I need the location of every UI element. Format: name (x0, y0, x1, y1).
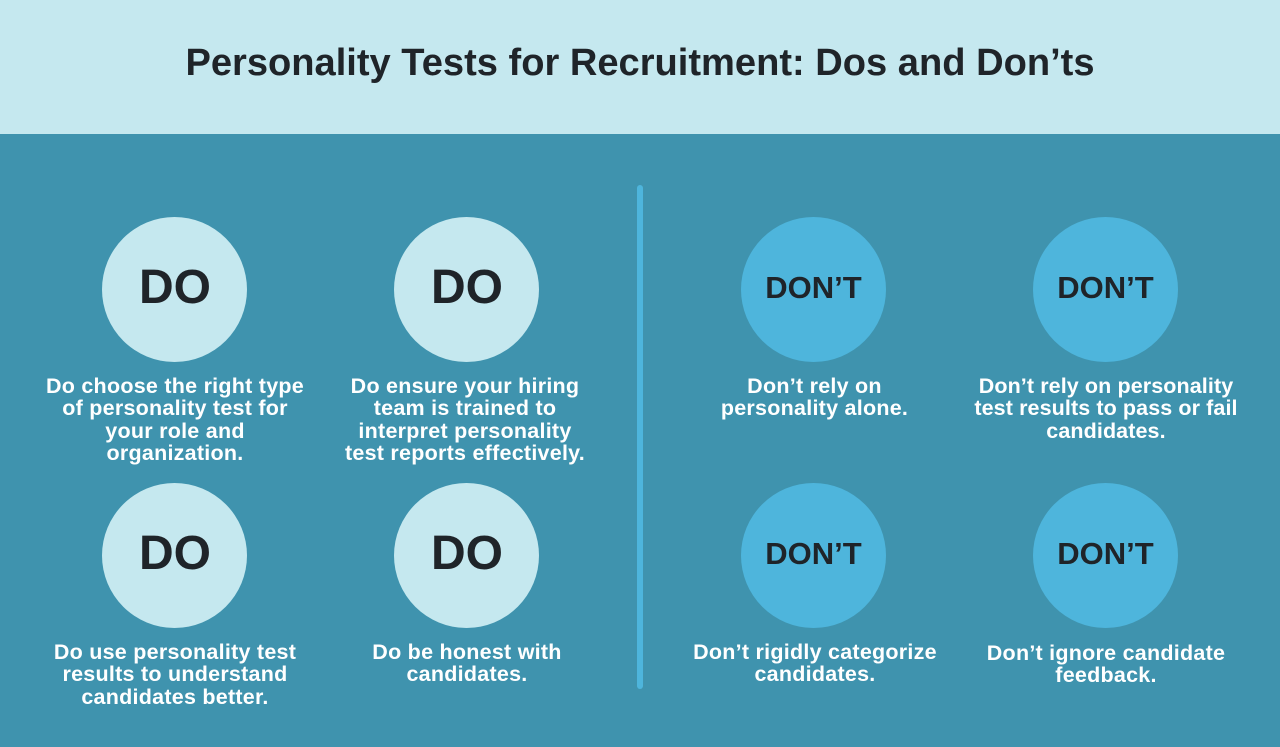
icon: DON'T circle 1 (741, 217, 886, 362)
header band (0, 0, 1280, 134)
text: do 1: of personality test for (62, 396, 288, 420)
text: do 2: team is trained to (374, 396, 556, 420)
text: don't 4: feedback. (1055, 663, 1157, 687)
text: don't 1: Don’t rely on (747, 374, 882, 398)
text: don't 4 (987, 641, 1225, 687)
text: don't 3: candidates. (754, 662, 876, 686)
center divider (637, 185, 643, 689)
text: do 3: Do use personality test (54, 640, 296, 664)
icon: DON'T circle 4 (1033, 483, 1178, 628)
text: don't 2: Don’t rely on personality (979, 374, 1233, 398)
text: do 4: candidates. (406, 662, 528, 686)
icon: DON'T circle 3: DON’T (765, 536, 862, 571)
text: do 4 (372, 640, 562, 686)
icon: DO circle 1 (102, 217, 247, 362)
icon: DO circle 3: DO (139, 527, 211, 580)
text: do 1 (46, 374, 304, 465)
text: do 2: interpret personality (358, 419, 572, 443)
text: do 2 (345, 374, 585, 465)
title: Personality Tests for Recruitment: Dos and Don’ts (185, 42, 1095, 84)
text: do 2: Do ensure your hiring (351, 374, 579, 398)
icon: DON'T circle 1: DON’T (765, 270, 862, 305)
text: don't 1 (721, 374, 908, 420)
text: don't 2 (974, 374, 1238, 443)
icon: DON'T circle 4: DON’T (1057, 536, 1154, 571)
icon: DO circle 4 (394, 483, 539, 628)
text: do 3: candidates better. (81, 685, 269, 709)
text: don't 2: candidates. (1046, 419, 1166, 443)
icon: DO circle 4: DO (431, 527, 503, 580)
text: do 3 (54, 640, 296, 709)
text: do 2: test reports effectively. (345, 441, 585, 465)
icon: DON'T circle 2: DON’T (1057, 270, 1154, 305)
icon: DO circle 1: DO (139, 261, 211, 314)
text: do 1: organization. (106, 441, 244, 465)
text: do 1: your role and (105, 419, 245, 443)
text: don't 3: Don’t rigidly categorize (693, 640, 937, 664)
text: do 1: Do choose the right type (46, 374, 304, 398)
icon: DON'T circle 2 (1033, 217, 1178, 362)
text: do 4: Do be honest with (372, 640, 562, 664)
text: don't 3 (693, 640, 937, 686)
icon: DO circle 2 (394, 217, 539, 362)
text: don't 1: personality alone. (721, 396, 908, 420)
text: don't 4: Don’t ignore candidate (987, 641, 1225, 665)
text: don't 2: test results to pass or fail (974, 396, 1238, 420)
icon: DO circle 3 (102, 483, 247, 628)
icon: DON'T circle 3 (741, 483, 886, 628)
icon: DO circle 2: DO (431, 261, 503, 314)
text: do 3: results to understand (62, 662, 288, 686)
